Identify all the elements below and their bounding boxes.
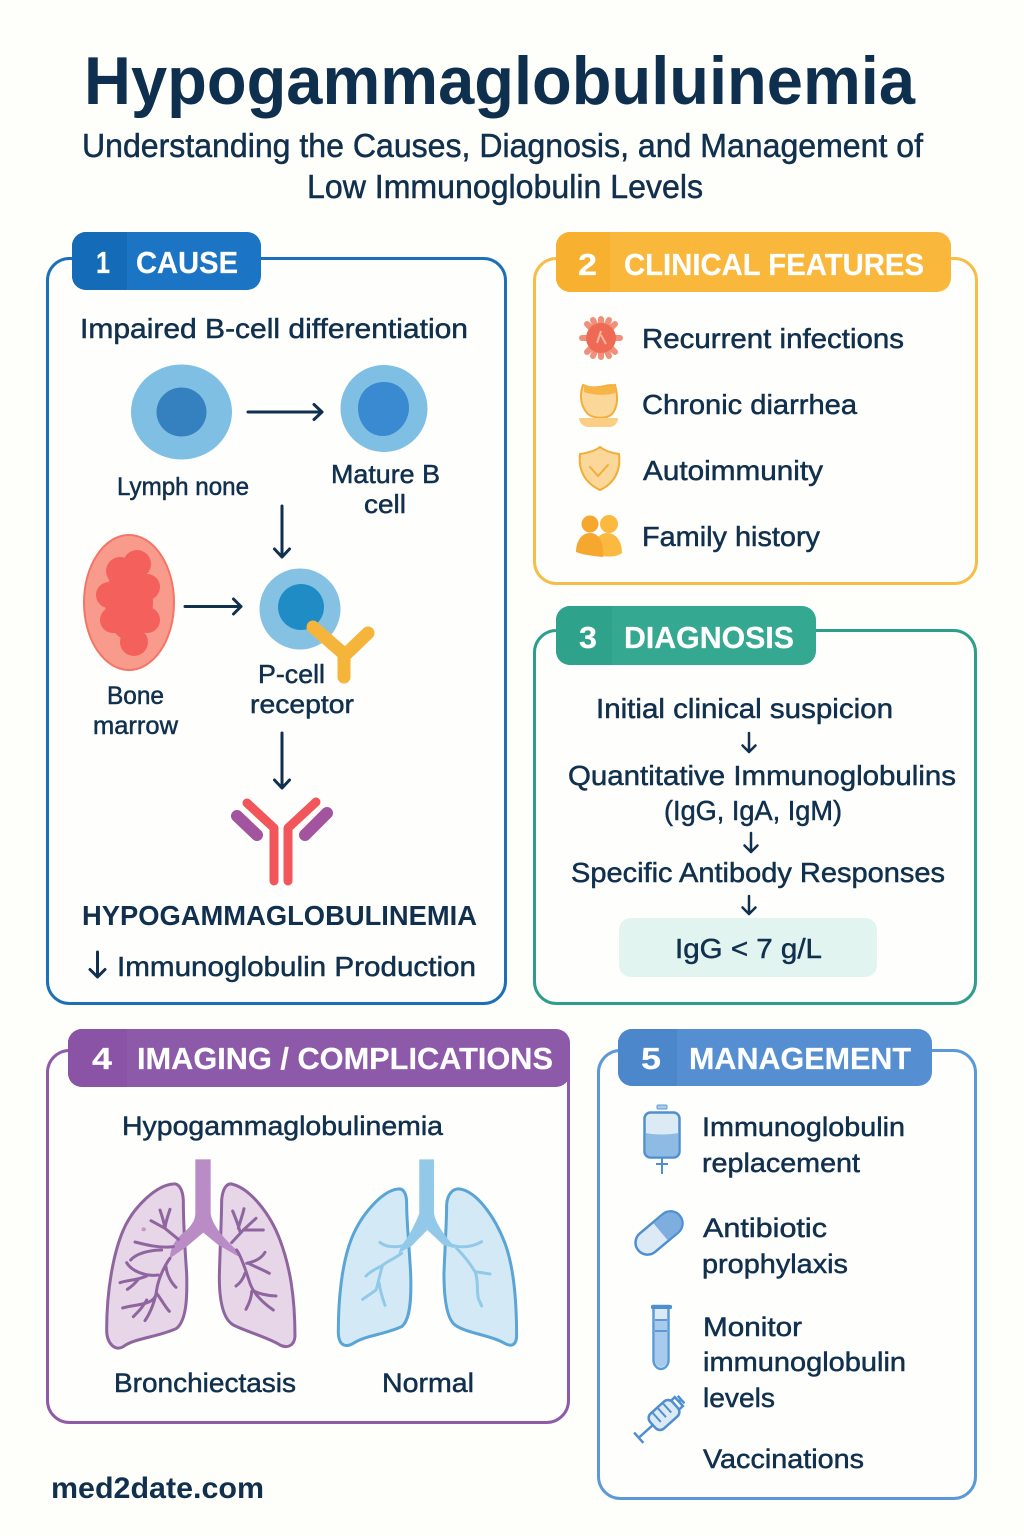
label: P-cell receptor: P-cell [258, 659, 325, 689]
text: immunoglobulin replacement [702, 1112, 905, 1178]
panel: clinical features [534, 232, 976, 584]
text: immunoglobulin replacement: replacement [702, 1148, 861, 1178]
icon: shield [580, 447, 619, 490]
arrow: step 1 [742, 733, 756, 752]
subtitle: Low Immunoglobulin Levels [307, 168, 703, 205]
heading: diagnosis: 3 [579, 620, 597, 655]
arrow: mature cell down [274, 506, 290, 557]
subtitle: Understanding the Causes, Diagnosis, and Management of [82, 127, 924, 164]
title: Hypogammaglobuluinemia [84, 43, 916, 119]
icon: bone marrow [84, 535, 174, 670]
panel: management [598, 1029, 976, 1498]
icon: syringe [632, 1392, 688, 1445]
step: quantitative immunoglobulins [568, 760, 956, 826]
label: autoimmunity: Autoimmunity [643, 455, 823, 486]
icon: test tube [651, 1305, 672, 1369]
step: initial suspicion: Initial clinical suspicion [596, 693, 893, 724]
subtitle [82, 127, 924, 205]
heading: cause: CAUSE [136, 245, 238, 280]
text: monitor immunoglobulin levels [703, 1312, 906, 1413]
label: recurrent infections: Recurrent infections [642, 323, 904, 354]
heading: clinical features: 2 [578, 247, 597, 282]
label: bone marrow: marrow [93, 712, 179, 740]
chart: bronchiectasis lungs [107, 1159, 295, 1348]
text: immunoglobulin replacement: Immunoglobulin [702, 1112, 905, 1142]
text: monitor immunoglobulin levels: levels [703, 1383, 775, 1413]
label: lymph none: Lymph none [117, 473, 249, 501]
icon: mature B cell [340, 365, 428, 452]
icon: capsule [631, 1206, 687, 1260]
icon: IV bag [644, 1105, 680, 1174]
heading: cause [72, 232, 261, 290]
footer: source site: med2date.com [51, 1472, 264, 1505]
heading: imaging and complications [68, 1029, 570, 1087]
label: mature B cell: Mature B [331, 459, 440, 489]
heading: management [618, 1029, 932, 1086]
label: family history: Family history [642, 521, 820, 552]
label: mature B cell: cell [364, 489, 406, 519]
label: normal: Normal [382, 1368, 474, 1398]
panel: cause [48, 232, 506, 1004]
arrow: step 2 [744, 833, 758, 852]
heading: management: 5 [641, 1041, 661, 1076]
heading: imaging and complications: 4 [92, 1041, 113, 1076]
icon: antibody [237, 802, 327, 881]
label: P-cell receptor: receptor [250, 689, 354, 719]
label: bone marrow [93, 682, 179, 740]
icon: virus [582, 319, 620, 357]
callout: IgG threshold [619, 918, 877, 977]
text: immunoglobulin production: Immunoglobulin Production [117, 951, 476, 982]
icon: family [576, 515, 622, 557]
text: impaired differentiation: Impaired B-cell differentiation [80, 313, 468, 344]
arrow: step 3 [742, 896, 756, 914]
text: antibiotic prophylaxis: prophylaxis [702, 1249, 848, 1279]
heading: diagnosis [556, 606, 816, 665]
label: P-cell receptor [250, 659, 354, 719]
icon: lymph node cell [131, 364, 232, 460]
label: mature B cell [331, 459, 440, 519]
chart: normal lungs [338, 1159, 517, 1346]
arrow: to mature B cell [248, 404, 322, 420]
heading: cause: 1 [96, 245, 110, 280]
step: quantitative immunoglobulins: (IgG, IgA, IgM) [664, 795, 842, 826]
callout: IgG threshold: IgG < 7 g/L [675, 933, 822, 964]
label: hypogammaglobulinemia: Hypogammaglobulinemia [122, 1111, 444, 1141]
label: chronic diarrhea: Chronic diarrhea [642, 389, 857, 420]
text: antibiotic prophylaxis: Antibiotic [703, 1213, 827, 1243]
step: antibody responses: Specific Antibody Responses [571, 857, 945, 888]
icon: down arrow [90, 952, 105, 977]
label: bone marrow: Bone [107, 682, 164, 710]
text: monitor immunoglobulin levels: Monitor [703, 1312, 802, 1342]
heading: diagnosis: DIAGNOSIS [624, 620, 794, 655]
heading: management: MANAGEMENT [689, 1041, 911, 1076]
text: hypogammaglobulinemia: HYPOGAMMAGLOBULINEMIA [82, 900, 477, 931]
text: antibiotic prophylaxis [702, 1213, 848, 1279]
text: vaccinations: Vaccinations [703, 1444, 864, 1474]
step: quantitative immunoglobulins: Quantitative Immunoglobulins [568, 760, 956, 791]
heading: imaging and complications: IMAGING / COMPLICATIONS [137, 1041, 553, 1076]
heading: clinical features: CLINICAL FEATURES [624, 247, 924, 282]
panel: imaging and complications [48, 1029, 570, 1422]
icon: digestive cup [579, 384, 618, 427]
text: monitor immunoglobulin levels: immunoglobulin [703, 1347, 906, 1377]
heading: clinical features [556, 232, 951, 292]
panel: diagnosis [534, 606, 976, 1004]
icon: receptor cell with receptor [260, 568, 368, 677]
arrow: marrow to receptor cell [185, 599, 241, 614]
arrow: receptor down [274, 733, 290, 788]
label: bronchiectasis: Bronchiectasis [114, 1368, 296, 1398]
